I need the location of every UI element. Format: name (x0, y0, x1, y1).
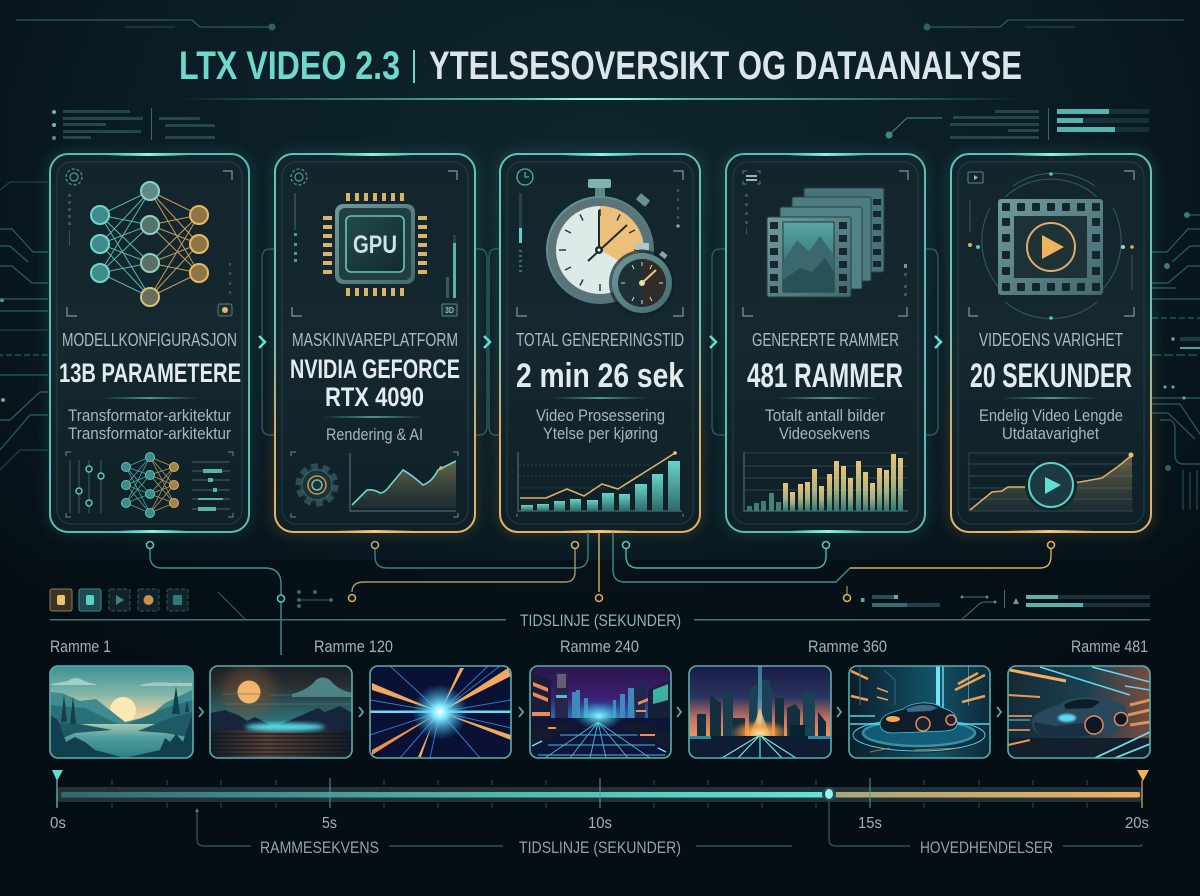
card glows (50, 154, 1151, 532)
time labels (50, 815, 1149, 832)
arrow (677, 707, 681, 717)
frame labels: Ramme 120 (314, 637, 393, 656)
value (290, 354, 460, 412)
frame labels: Ramme 360 (808, 637, 887, 656)
frame labels: Ramme 1 (50, 637, 111, 656)
mini panel: sliders, network, bars (66, 452, 233, 518)
description: Endelig Video Lengde (979, 406, 1123, 425)
time labels: 5s (322, 815, 337, 832)
description (979, 406, 1123, 443)
description: Videosekvens (779, 424, 870, 443)
value: 13B PARAMETERE (59, 358, 241, 388)
arrow: card 3 to 4 (710, 336, 716, 348)
thumbnail: frame 240 light rays (370, 666, 511, 758)
circuit traces: right edge (1152, 212, 1200, 510)
panel: model configuration (50, 153, 249, 533)
value: 2 min 26 sek (516, 357, 684, 395)
value: RTX 4090 (325, 382, 424, 412)
value: 481 RAMMER (747, 357, 903, 395)
description: Ytelse per kjøring (543, 424, 658, 443)
description: Video Prosessering (536, 406, 665, 425)
thumbnail: frame 481 speeding car (1008, 666, 1150, 758)
description: Transformator-arkitektur (68, 406, 231, 425)
value: NVIDIA GEFORCE (290, 354, 460, 384)
timeline scrubber (52, 770, 1149, 808)
description (765, 406, 885, 443)
marker: end (1137, 770, 1149, 781)
thumbnail: frame 120 sunset (210, 666, 352, 758)
time labels: 10s (588, 815, 612, 832)
frame labels: Ramme 240 (560, 637, 639, 656)
label: TOTAL GENERERINGSTID (516, 330, 684, 350)
connector lines: cards to timeline (146, 532, 1054, 655)
icon: film with play button (998, 199, 1103, 295)
icon: small video window (968, 172, 983, 183)
annotations below timeline (195, 802, 1142, 857)
panel: generated frames (726, 153, 925, 533)
title (179, 44, 1022, 88)
thumbnail: frame 360 car on platform (849, 666, 990, 758)
frame labels: Ramme 481 (1071, 637, 1148, 656)
thumbnail: frame 1 lake landscape (50, 666, 193, 758)
annotations below timeline: HOVEDHENDELSER (920, 838, 1053, 857)
circuit traces: top left header (16, 20, 276, 30)
icon: gear outline (291, 169, 307, 185)
arrow (997, 707, 1001, 717)
header data readout left (52, 108, 215, 140)
label: VIDEOENS VARIGHET (979, 330, 1123, 350)
side readouts (745, 194, 907, 296)
label: MASKINVAREPLATFORM (292, 330, 458, 350)
title: LTX VIDEO 2.3 (179, 44, 400, 88)
thumbnail: neon skyline (689, 666, 831, 758)
orbit rings around film (968, 172, 1134, 320)
icon: stopwatch (546, 179, 675, 316)
title underline (180, 98, 1020, 100)
description (536, 406, 665, 443)
title: YTELSESOVERSIKT OG DATAANALYSE (429, 44, 1022, 88)
description: Utdatavarighet (1002, 424, 1099, 443)
arrow: card 4 to 5 (935, 336, 941, 348)
annotations below timeline: RAMMESEKVENS (260, 838, 379, 857)
icon: GPU chip (323, 193, 427, 296)
time labels: 0s (50, 815, 66, 832)
playhead (822, 787, 836, 801)
side gauge (519, 189, 680, 272)
icon: small clock (517, 169, 533, 185)
annotations below timeline: TIDSLINJE (SEKUNDER) (519, 838, 681, 857)
arrow: card 1 to 2 (259, 336, 265, 348)
description: Totalt antall bilder (765, 406, 885, 425)
header data readout right (886, 108, 1149, 140)
gauges (294, 193, 456, 298)
marker: start (52, 770, 63, 781)
label: MODELLKONFIGURASJON (62, 330, 237, 350)
time labels: 20s (1125, 815, 1149, 832)
arrow (837, 707, 841, 717)
icon: neural network (91, 182, 208, 306)
arrow: card 2 to 3 (484, 336, 490, 348)
panel: total generation time (500, 153, 700, 533)
bar and line chart (517, 451, 683, 517)
arrow (519, 707, 523, 717)
time labels: 15s (858, 815, 882, 832)
side brackets between cards (262, 249, 938, 435)
arrow (359, 707, 363, 717)
icon: settings atom (66, 169, 82, 185)
icon: GPU chip: GPU (353, 231, 397, 259)
panel: video duration (951, 153, 1151, 533)
heading: timeline divider: TIDSLINJE (SEKUNDER) (520, 611, 681, 630)
circuit traces: left edge (0, 182, 48, 470)
bar chart (744, 452, 908, 511)
description (68, 406, 231, 443)
icon: status badge (218, 304, 232, 316)
badge (442, 304, 457, 316)
icon: gear (291, 452, 458, 517)
description: Transformator-arkitektur (68, 424, 231, 443)
side readout (68, 194, 231, 294)
area chart with play button (969, 452, 1134, 511)
icon: frame list (743, 171, 760, 184)
line chart (350, 453, 456, 511)
label: GENERERTE RAMMER (752, 330, 899, 350)
icon: film frame stack (767, 188, 884, 297)
data ornaments right (861, 590, 1150, 619)
thumbnail: frame 240 neon street (530, 666, 671, 758)
legend icons row (50, 589, 188, 611)
small circuit ornaments (218, 590, 332, 619)
description: Rendering & AI (326, 425, 423, 444)
panel: hardware platform (275, 153, 475, 533)
frame labels (50, 637, 1148, 656)
circuit traces: top right header (924, 20, 1184, 30)
arrow (199, 707, 203, 717)
badge: 3D (445, 306, 454, 315)
